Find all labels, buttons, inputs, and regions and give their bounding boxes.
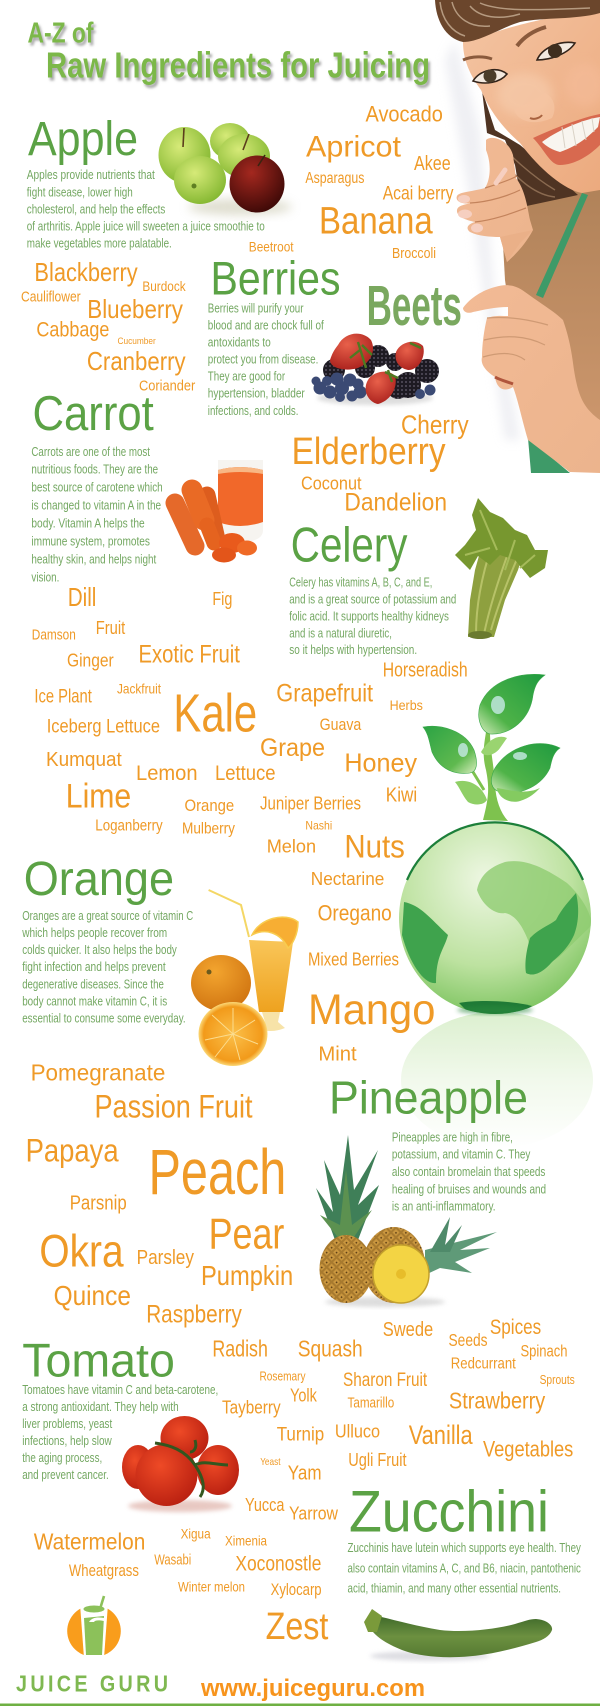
title line: A-Z of: A-Z of — [28, 17, 94, 49]
word: Beetroot: Beetroot — [249, 239, 294, 255]
word: Sharon Fruit: Sharon Fruit — [343, 1369, 428, 1391]
word: Banana: Banana — [319, 200, 433, 242]
text block: carrot description: body. Vitamin A helps the — [31, 517, 145, 531]
text block: carrot description: Carrots are one of the most — [31, 445, 150, 459]
word: Yolk: Yolk — [290, 1385, 317, 1406]
word: Tayberry: Tayberry — [222, 1397, 281, 1417]
text block: pineapple description: healing of bruises and wounds and — [392, 1182, 546, 1196]
word: Strawberry: Strawberry — [449, 1387, 546, 1413]
word: Spices: Spices — [490, 1315, 541, 1339]
text block: carrot description: immune system, promotes — [31, 535, 150, 549]
text block: apple description — [27, 168, 265, 250]
panel: apple — [27, 113, 292, 250]
word: Pumpkin: Pumpkin — [201, 1260, 293, 1291]
word: Coriander: Coriander — [139, 378, 195, 395]
word: Watermelon: Watermelon — [34, 1528, 145, 1554]
word: Kumquat: Kumquat — [46, 749, 122, 771]
word: Loganberry: Loganberry — [95, 818, 163, 835]
word: Fig: Fig — [212, 588, 232, 609]
text block: carrot description: is changed to vitamin A in the — [31, 499, 161, 513]
word: Yam: Yam — [288, 1462, 322, 1484]
text block: apple description: cholesterol, and help the effects — [27, 202, 165, 216]
word: Cherry: Cherry — [401, 411, 469, 439]
text block: carrot description — [31, 445, 163, 585]
word: Damson: Damson — [32, 627, 76, 643]
word: Pear: Pear — [209, 1209, 284, 1258]
icon: celery — [455, 498, 548, 639]
title line: Raw Ingredients for Juicing: Raw Ingredients for Juicing — [46, 44, 430, 85]
title — [28, 17, 430, 85]
word: Turnip: Turnip — [277, 1424, 324, 1446]
word: Redcurrant: Redcurrant — [451, 1356, 516, 1373]
text block: carrot description: nutritious foods. They are the — [31, 463, 158, 477]
text block: tomato description — [22, 1383, 218, 1482]
word: Raspberry: Raspberry — [146, 1302, 242, 1329]
website url: www.juiceguru.com — [200, 1675, 425, 1702]
panel: orange — [21, 853, 298, 1066]
text block: tomato description: Tomatoes have vitamin C and beta-carotene, — [22, 1383, 218, 1397]
word: Apricot: Apricot — [306, 131, 402, 164]
word: Vegetables: Vegetables — [483, 1437, 573, 1462]
word: Lime: Lime — [66, 777, 131, 815]
globe reflection — [401, 1012, 593, 1148]
globe rim — [407, 822, 583, 880]
icon: tomatoes on the vine — [122, 1416, 239, 1512]
word: Sprouts: Sprouts — [540, 1373, 575, 1387]
word: Yarrow: Yarrow — [289, 1503, 339, 1523]
text block: tomato description: a strong antioxidant. They help with — [22, 1400, 179, 1414]
word: Cucumber: Cucumber — [118, 336, 156, 347]
icon: pineapples — [316, 1135, 497, 1307]
text block: pineapple description — [392, 1131, 546, 1213]
panel: pineapple — [316, 1071, 546, 1307]
word: Nectarine: Nectarine — [311, 868, 384, 889]
heading: Zucchini: Zucchini — [349, 1480, 549, 1545]
text block: apple description: Apples provide nutrients that — [27, 168, 155, 182]
text block: berries description — [208, 301, 324, 418]
word: Honey: Honey — [344, 750, 417, 778]
word: Herbs: Herbs — [390, 697, 423, 713]
heading: Beets: Beets — [367, 274, 462, 338]
word: Jackfruit: Jackfruit — [117, 680, 161, 696]
word: Horseradish: Horseradish — [383, 660, 468, 682]
continents — [402, 861, 592, 1014]
word: Grapefruit: Grapefruit — [276, 681, 373, 708]
word: Mango: Mango — [308, 986, 435, 1034]
word: Grape: Grape — [260, 735, 325, 762]
heading: Berries: Berries — [210, 253, 340, 306]
text block: berries description: blood and are chock full of — [208, 318, 324, 332]
word: Vanilla: Vanilla — [409, 1420, 473, 1450]
bottom green bar — [0, 1704, 600, 1706]
word: Okra: Okra — [39, 1226, 124, 1277]
word: Coconut: Coconut — [301, 472, 362, 493]
word: Mulberry: Mulberry — [182, 820, 235, 837]
text block: berries description: hypertension, bladder — [208, 387, 305, 401]
icon: berries pile — [312, 334, 439, 405]
panel: zucchini — [348, 1480, 581, 1661]
word: Iceberg Lettuce: Iceberg Lettuce — [47, 717, 160, 738]
word: Passion Fruit: Passion Fruit — [94, 1088, 253, 1124]
word: Radish: Radish — [212, 1336, 268, 1362]
icon: globe with sprouting plant — [399, 674, 593, 1148]
word: Broccoli: Broccoli — [392, 245, 436, 262]
text block: tomato description: infections, help slow — [22, 1434, 113, 1448]
text block: tomato description: liver problems, yeast — [22, 1417, 113, 1431]
text block: carrot description: best source of carotene which — [31, 481, 163, 495]
word: Fruit: Fruit — [96, 617, 126, 638]
text block: celery description: and is a great source of potassium and — [289, 593, 456, 607]
word: Guava: Guava — [320, 715, 362, 734]
word: Lettuce: Lettuce — [215, 762, 276, 785]
globe sphere — [399, 822, 591, 1014]
word: Cauliflower: Cauliflower — [21, 289, 81, 305]
word: Ugli Fruit: Ugli Fruit — [348, 1449, 407, 1470]
word: Orange: Orange — [184, 796, 234, 815]
text block: apple description: of arthritis. Apple juice will sweeten a juice smoothie to — [27, 219, 265, 233]
text block: celery description: and is a natural diuretic, — [289, 626, 392, 640]
panel: tomato — [22, 1335, 239, 1512]
plant stem and leaves — [423, 674, 560, 821]
heading: Pineapple: Pineapple — [329, 1071, 528, 1123]
wordmark: JUICE GURU: JUICE GURU — [16, 1671, 171, 1697]
word: Lemon: Lemon — [136, 762, 198, 785]
text block: berries description: protect you from disease. — [208, 353, 318, 367]
text block: pineapple description: is an anti-inflammatory. — [392, 1199, 496, 1213]
word: Ice Plant: Ice Plant — [34, 687, 92, 708]
word: Xylocarp: Xylocarp — [271, 1580, 322, 1599]
word: Melon: Melon — [267, 836, 316, 857]
panel: carrot — [31, 387, 263, 585]
heading: Apple: Apple — [28, 113, 138, 166]
text block: berries description: infections, and colds. — [208, 404, 298, 418]
word cloud: A to C — [21, 102, 469, 517]
word: Spinach: Spinach — [520, 1343, 568, 1361]
text block: tomato description: and prevent cancer. — [22, 1468, 109, 1482]
word: Avocado: Avocado — [366, 102, 443, 127]
text block: zucchini description — [348, 1541, 581, 1596]
word: Winter melon: Winter melon — [178, 1579, 245, 1595]
heading: Celery: Celery — [291, 519, 408, 573]
word: Peach: Peach — [148, 1136, 286, 1208]
word: Nashi: Nashi — [305, 818, 332, 832]
word cloud: D to L — [32, 582, 468, 970]
text block: pineapple description: Pineapples are high in fibre, — [392, 1131, 513, 1145]
word: Kiwi: Kiwi — [386, 785, 417, 807]
heading: Carrot: Carrot — [32, 387, 154, 441]
word: Zest: Zest — [266, 1606, 329, 1648]
word: Ximenia: Ximenia — [225, 1532, 267, 1548]
word: Asparagus: Asparagus — [305, 170, 365, 187]
word: Kale: Kale — [173, 685, 257, 744]
text block: pineapple description: potassium, and vitamin C. They — [392, 1148, 531, 1162]
word: Parsley: Parsley — [137, 1246, 195, 1269]
icon: orange juice and oranges — [191, 890, 298, 1066]
word: Mint: Mint — [318, 1043, 357, 1066]
text block: celery description: folic acid. It supports healthy kidneys — [289, 609, 449, 623]
word: Oregano: Oregano — [318, 901, 392, 926]
text block: orange description — [21, 909, 193, 1025]
text block: orange description: Oranges are a great source of vitamin C — [22, 909, 193, 923]
word: Burdock: Burdock — [142, 278, 186, 294]
word: Ulluco: Ulluco — [335, 1420, 380, 1441]
icon: zucchini — [364, 1609, 552, 1661]
text block: orange description: body cannot make vitamin C, it is — [22, 994, 167, 1008]
word: Pomegranate: Pomegranate — [31, 1060, 165, 1086]
text block: orange description: which helps people recover from — [21, 926, 167, 940]
word: Dill: Dill — [68, 582, 96, 612]
logo: Juice Guru — [16, 1596, 171, 1697]
text block: orange description: essential to consume some everyday. — [22, 1011, 186, 1025]
word: Mixed Berries: Mixed Berries — [308, 950, 399, 970]
word: Yeast: Yeast — [260, 1456, 281, 1468]
text block: celery description: so it helps with hypertension. — [289, 643, 417, 657]
word cloud: M to Q — [26, 986, 435, 1329]
word: Acai berry: Acai berry — [383, 182, 454, 204]
text block: orange description: degenerative diseases. Since the — [22, 977, 164, 991]
word: Blueberry: Blueberry — [87, 294, 183, 324]
word: Parsnip: Parsnip — [70, 1192, 127, 1214]
word: Dandelion: Dandelion — [344, 489, 447, 517]
word: Cabbage: Cabbage — [36, 319, 109, 342]
text block: carrot description: healthy skin, and helps night — [31, 553, 157, 567]
word: Swede: Swede — [383, 1319, 433, 1341]
panel: celery — [289, 498, 548, 657]
word: Quince: Quince — [54, 1280, 131, 1311]
word: Nuts: Nuts — [344, 827, 405, 864]
word: Cranberry: Cranberry — [87, 348, 186, 376]
word: Rosemary: Rosemary — [260, 1370, 306, 1384]
heading: Tomato: Tomato — [22, 1335, 175, 1388]
panel: berries — [208, 253, 439, 418]
word: Tamarillo: Tamarillo — [348, 1396, 394, 1412]
text block: berries description: They are good for — [208, 370, 285, 384]
text block: berries description: antoxidants to — [208, 336, 271, 350]
heading: Orange: Orange — [24, 853, 174, 906]
word: Ginger: Ginger — [67, 651, 114, 671]
word: Yucca: Yucca — [245, 1495, 285, 1515]
word: Squash: Squash — [298, 1336, 363, 1362]
word: Blackberry: Blackberry — [34, 257, 138, 287]
word: Exotic Fruit: Exotic Fruit — [138, 642, 240, 669]
word: Elderberry: Elderberry — [292, 431, 446, 473]
word: Wheatgrass: Wheatgrass — [69, 1561, 139, 1580]
text block: tomato description: the aging process, — [22, 1451, 102, 1465]
icon: carrots and juice glass — [175, 460, 263, 562]
word: Seeds: Seeds — [448, 1330, 488, 1350]
photo: smiling woman peeking around page — [435, 0, 600, 473]
word: Xigua: Xigua — [181, 1525, 211, 1541]
text block: berries description: Berries will purify your — [208, 301, 304, 315]
text block: apple description: fight disease, lower high — [27, 185, 133, 199]
word: Juniper Berries: Juniper Berries — [260, 792, 361, 813]
text block: celery description: Celery has vitamins A, B, C, and E, — [289, 576, 432, 590]
word cloud: R to Z — [34, 1315, 575, 1648]
word: Akee: Akee — [414, 153, 451, 175]
word: Wasabi: Wasabi — [154, 1552, 191, 1568]
text block: orange description: colds quicker. It also helps the body — [22, 943, 177, 957]
text block: pineapple description: also contain bromelain that speeds — [392, 1165, 545, 1179]
text block: orange description: fight infection and helps prevent — [22, 960, 166, 974]
text block: celery description — [289, 576, 456, 657]
icon: orange circle with juice glass — [67, 1596, 121, 1658]
text block: apple description: make vegetables more palatable. — [27, 236, 172, 250]
word: Papaya: Papaya — [26, 1132, 119, 1169]
icon: apples — [158, 123, 292, 215]
word: Xoconostle: Xoconostle — [235, 1552, 321, 1576]
text block: carrot description: vision. — [31, 571, 59, 585]
